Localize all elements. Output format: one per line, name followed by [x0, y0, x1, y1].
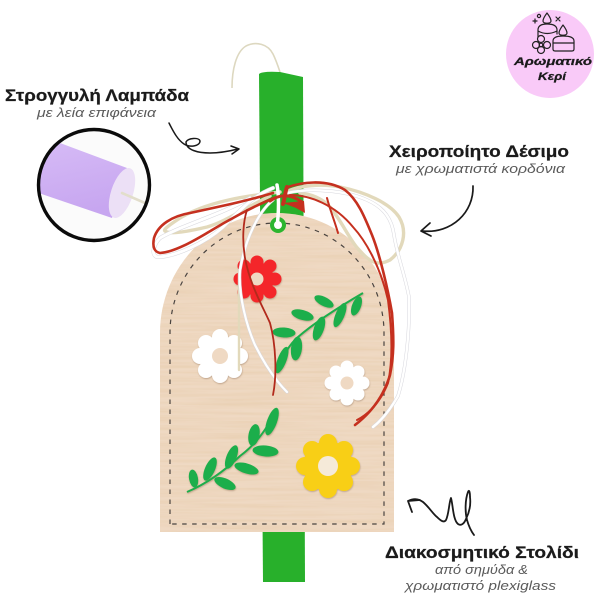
candle end face	[108, 168, 136, 218]
upper green branch	[272, 293, 364, 375]
stitched dashed outline	[170, 223, 384, 524]
lower green branch	[187, 406, 282, 493]
wooden tag body	[160, 213, 394, 532]
inset: purple candle close-up	[30, 130, 150, 240]
badge text line two: Κερί	[538, 71, 567, 83]
white cord loops	[154, 185, 409, 427]
badge: scented candle	[506, 10, 594, 98]
subtitle: coloured cords: με χρωματιστά κορδόνια	[395, 162, 566, 176]
heading: handmade tie: Χειροποίητο Δέσιμο	[389, 142, 569, 161]
white flower right	[324, 360, 370, 406]
arrow to candle	[169, 123, 239, 154]
heading: round candle: Στρογγυλή Λαμπάδα	[5, 86, 190, 105]
heading: decorative ornament: Διακοσμητικό Στολίδι	[385, 543, 579, 562]
candle wick	[232, 44, 280, 88]
white flower left	[192, 329, 248, 383]
heading block: decorative ornament	[385, 543, 579, 593]
heading block: round candle	[5, 86, 190, 120]
subtitle: birch: από σημύδα &	[435, 563, 528, 577]
subtitle: smooth surface: με λεία επιφάνεια	[36, 106, 157, 120]
red cord behind tag	[283, 201, 305, 213]
cream cord loops	[165, 185, 404, 370]
subtitle: plexiglass: χρωματιστό plexiglass	[404, 579, 556, 593]
purple candle body	[40, 143, 127, 218]
yellow flower centre	[318, 456, 338, 476]
inset wick	[122, 193, 145, 203]
yellow flower	[296, 434, 360, 498]
decorative tag	[155, 205, 400, 535]
heading block: handmade tie	[389, 142, 569, 176]
white flower right centre	[340, 376, 354, 390]
white cord under-shadow	[154, 188, 409, 427]
red flower centre	[250, 272, 264, 286]
green candle	[259, 72, 305, 582]
white flower left centre	[212, 348, 228, 364]
red cord loops	[153, 182, 393, 425]
tag hole	[270, 217, 286, 233]
arrow to tie	[421, 186, 473, 236]
icon: candles and flower	[532, 13, 574, 54]
badge text line one: Αρωματικό	[513, 56, 592, 68]
squiggle arrow to ornament	[408, 491, 474, 535]
red flower	[234, 256, 282, 302]
twine bow	[153, 182, 409, 427]
